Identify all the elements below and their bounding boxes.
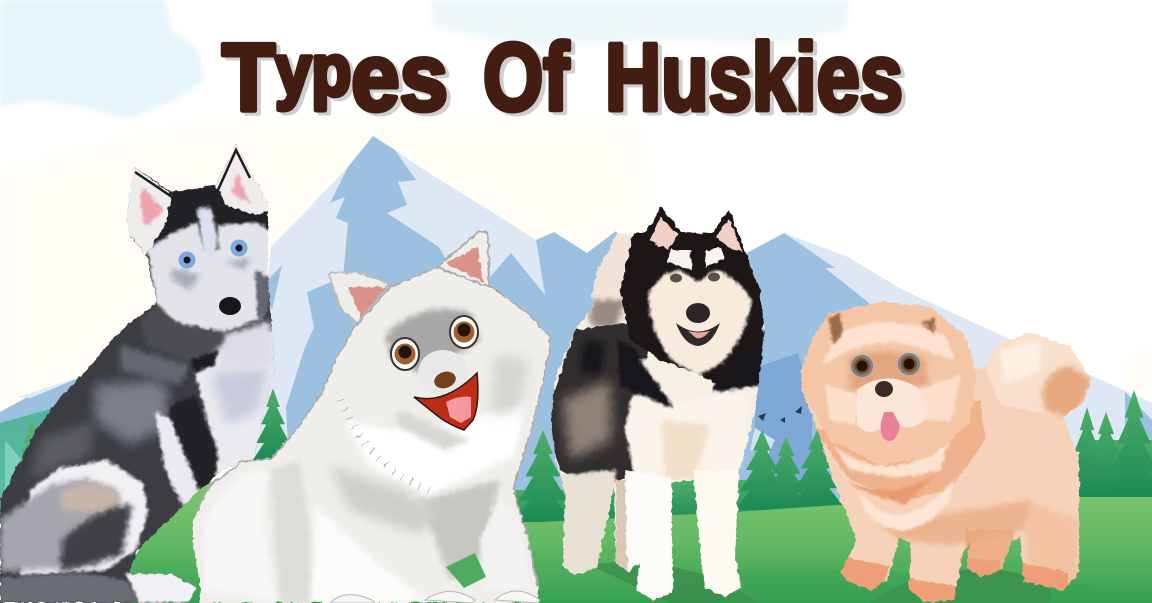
- nose: [432, 369, 458, 391]
- title shadow: es: [355, 27, 452, 134]
- cloud: right edge cream: [1125, 345, 1152, 405]
- white bib: [345, 400, 525, 495]
- chest and front legs: [195, 330, 280, 490]
- cloud: blue top left: [0, 0, 205, 118]
- title text: es: [351, 24, 448, 131]
- paws: [840, 557, 890, 591]
- tongue: [446, 397, 471, 423]
- coat base: [790, 295, 1100, 603]
- front legs: [625, 470, 678, 603]
- neck fur: [141, 302, 228, 362]
- ground shadows: [590, 562, 760, 603]
- muzzle: [857, 378, 928, 432]
- head shading: [490, 355, 530, 415]
- head: [802, 302, 976, 465]
- title text: Of: [483, 24, 570, 131]
- cloud: cream haze: [0, 120, 650, 420]
- paws: [330, 591, 540, 603]
- ears: [125, 167, 172, 255]
- head: [146, 215, 272, 332]
- haunch grey: [0, 478, 122, 572]
- muzzle: [418, 350, 468, 396]
- nose: [219, 297, 241, 315]
- title: [222, 24, 907, 134]
- ears: [829, 313, 843, 345]
- body shading: [1025, 500, 1079, 590]
- ears: [329, 232, 489, 323]
- teal hill: [0, 408, 150, 520]
- title shadow: Huskies: [609, 27, 907, 134]
- eyes: [851, 355, 873, 377]
- grey streaks: [95, 380, 170, 445]
- title text: Huskies: [605, 24, 903, 131]
- title text: [222, 24, 903, 131]
- tail: [985, 333, 1091, 417]
- haunch highlight: [206, 472, 276, 600]
- far legs: [965, 530, 1015, 575]
- green gap between legs: [446, 553, 486, 588]
- pine trees: [17, 388, 1152, 525]
- tail: [592, 234, 632, 320]
- title shadow: T: [226, 27, 285, 134]
- white leg stripe: [154, 410, 201, 508]
- haunch white ring: [20, 460, 148, 575]
- right peak blue: [730, 233, 1000, 500]
- belly shadow: [420, 480, 500, 580]
- fur ticks: [340, 400, 430, 490]
- chest: [625, 395, 745, 500]
- coat base: [0, 140, 280, 603]
- title shadow: Of: [487, 27, 574, 134]
- dog: siberian husky puppy: [0, 140, 280, 603]
- black head top: [620, 205, 770, 385]
- dark flank: [550, 323, 648, 483]
- cloud: blue top centre: [430, 0, 850, 48]
- brow patches: [666, 248, 725, 270]
- eyes: [391, 338, 419, 370]
- eyes and nose: [670, 274, 682, 282]
- dog: fluffy white pomeranian: [185, 232, 555, 603]
- black neck stripes: [618, 340, 672, 408]
- far left mountain: [0, 372, 150, 480]
- icon: birds: [758, 406, 802, 423]
- title shadow: yp: [279, 34, 355, 114]
- tail: [0, 573, 140, 603]
- ear tips: [135, 150, 250, 197]
- coat base: [550, 225, 766, 600]
- face mask: [648, 270, 752, 376]
- dog: malamute husky: [550, 206, 766, 600]
- hind legs: [560, 470, 616, 575]
- mouth: [414, 373, 478, 430]
- outline shading: [193, 267, 552, 587]
- dark shoulder: [168, 395, 218, 500]
- eyes: [178, 252, 196, 268]
- dog: chow chow: [790, 295, 1100, 603]
- main peak snow: [250, 136, 560, 480]
- grey forehead mask: [385, 309, 480, 375]
- ears: [650, 217, 678, 250]
- paw: [125, 572, 200, 603]
- main peak blue: [286, 136, 660, 500]
- title text: yp: [275, 31, 351, 111]
- nose and tongue: [875, 381, 893, 397]
- mountains: [0, 136, 1152, 520]
- grass ground: [120, 470, 1152, 603]
- mane: [815, 400, 985, 500]
- title shadow: [226, 27, 907, 134]
- coat base: [185, 260, 555, 603]
- lower blue ridge: [755, 353, 812, 500]
- right peak snow: [784, 233, 1152, 500]
- title text: T: [222, 24, 281, 131]
